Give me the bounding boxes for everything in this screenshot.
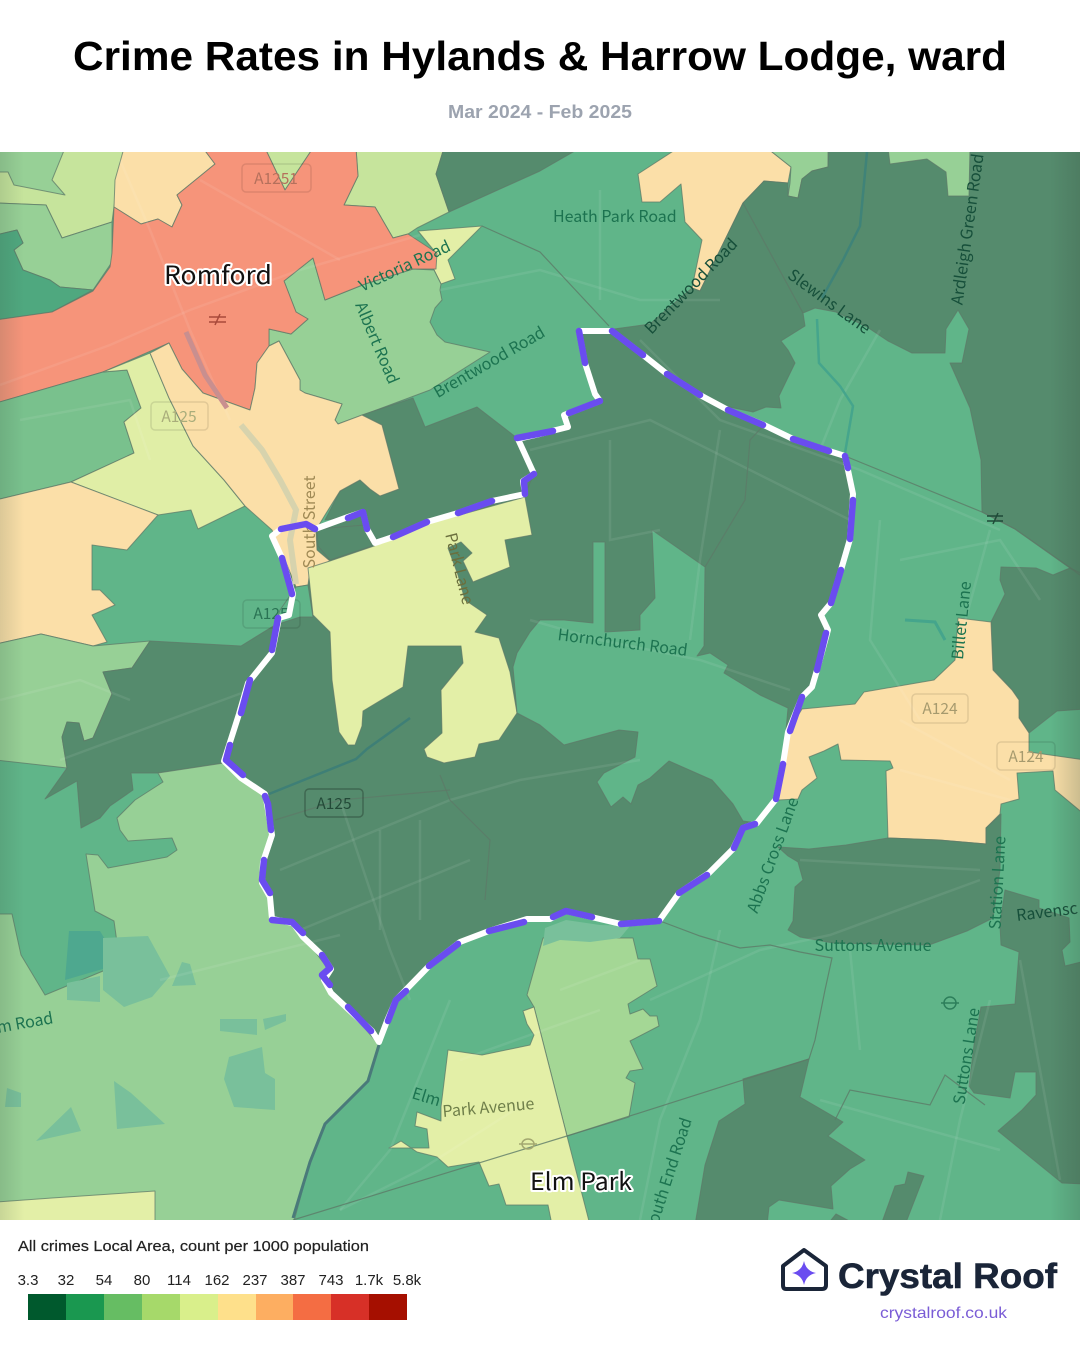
legend scale: 114 xyxy=(167,1272,191,1289)
legend scale: 387 xyxy=(280,1272,306,1289)
website link: crystalroof.co.uk xyxy=(880,1305,1008,1322)
road network xyxy=(0,160,1060,1220)
road badge labels: A1251 xyxy=(254,167,298,189)
place label: Elm Park: Elm Park xyxy=(530,1162,632,1197)
road name labels: Park Lane xyxy=(440,530,481,607)
road name labels: Heath Park Road xyxy=(553,203,677,227)
legend scale xyxy=(18,1272,422,1320)
legend scale: 5.8k xyxy=(393,1272,422,1289)
road name labels: Brentwood Road xyxy=(428,319,549,403)
logo wordmark: Crystal Roof xyxy=(838,1257,1057,1296)
road name labels: Suttons Avenue xyxy=(814,932,932,956)
road name labels: Ardleigh Green Road xyxy=(944,152,989,306)
south areas xyxy=(527,938,659,1136)
water and parks xyxy=(5,920,630,1141)
legend scale: 54 xyxy=(96,1272,112,1289)
legend scale: 3.3 xyxy=(18,1272,38,1289)
crime rate areas xyxy=(0,148,1080,1225)
road name labels: Brentwood Road xyxy=(638,232,742,339)
title: Crime Rates in Hylands & Harrow Lodge, ward xyxy=(73,33,1007,79)
road badge labels: A125 xyxy=(316,792,352,814)
road name labels: Ravensc xyxy=(1015,895,1079,926)
road badge labels: A124 xyxy=(922,697,958,719)
road name labels: Suttons Lane xyxy=(946,1006,985,1106)
road badge labels: A125 xyxy=(253,602,289,624)
road name labels: Elm xyxy=(410,1080,444,1111)
legend title: All crimes Local Area, count per 1000 population xyxy=(18,1238,369,1255)
road name labels: Slewins Lane xyxy=(784,262,877,339)
legend scale: 32 xyxy=(58,1272,74,1289)
road name labels: Victoria Road xyxy=(354,233,454,296)
north-east areas xyxy=(638,148,791,291)
map edge vignette xyxy=(0,152,1080,1220)
road name labels: South End Road xyxy=(637,1114,697,1235)
road name labels: South Street xyxy=(296,475,320,569)
road badge labels: A124 xyxy=(1008,745,1044,767)
road badge labels: A125 xyxy=(161,405,197,427)
ward boundary xyxy=(224,331,853,1042)
legend scale: 1.7k xyxy=(355,1272,384,1289)
place label: Romford: Romford xyxy=(164,256,272,292)
boundary lines xyxy=(275,203,1080,1220)
road name labels: Abbs Cross Lane xyxy=(739,793,804,916)
station symbols xyxy=(209,314,1003,1149)
legend scale: 80 xyxy=(134,1272,150,1289)
road badge labels xyxy=(161,167,1044,814)
road name labels: Hornchurch Road xyxy=(557,621,689,661)
south-east areas xyxy=(778,814,1001,945)
road name labels: Station Lane xyxy=(982,835,1010,930)
legend scale: 162 xyxy=(204,1272,230,1289)
road name labels: Park Avenue xyxy=(441,1090,535,1122)
legend scale: 743 xyxy=(318,1272,344,1289)
road name labels: Billet Lane xyxy=(944,580,976,661)
icon: crystal roof house logo xyxy=(783,1250,826,1289)
rail and waterways xyxy=(186,152,945,1218)
subtitle: date range: Mar 2024 - Feb 2025 xyxy=(448,102,632,122)
ward interior xyxy=(224,331,853,1042)
road name labels: Albert Road xyxy=(350,297,407,387)
legend scale: 237 xyxy=(242,1272,268,1289)
road badges xyxy=(151,164,1055,817)
